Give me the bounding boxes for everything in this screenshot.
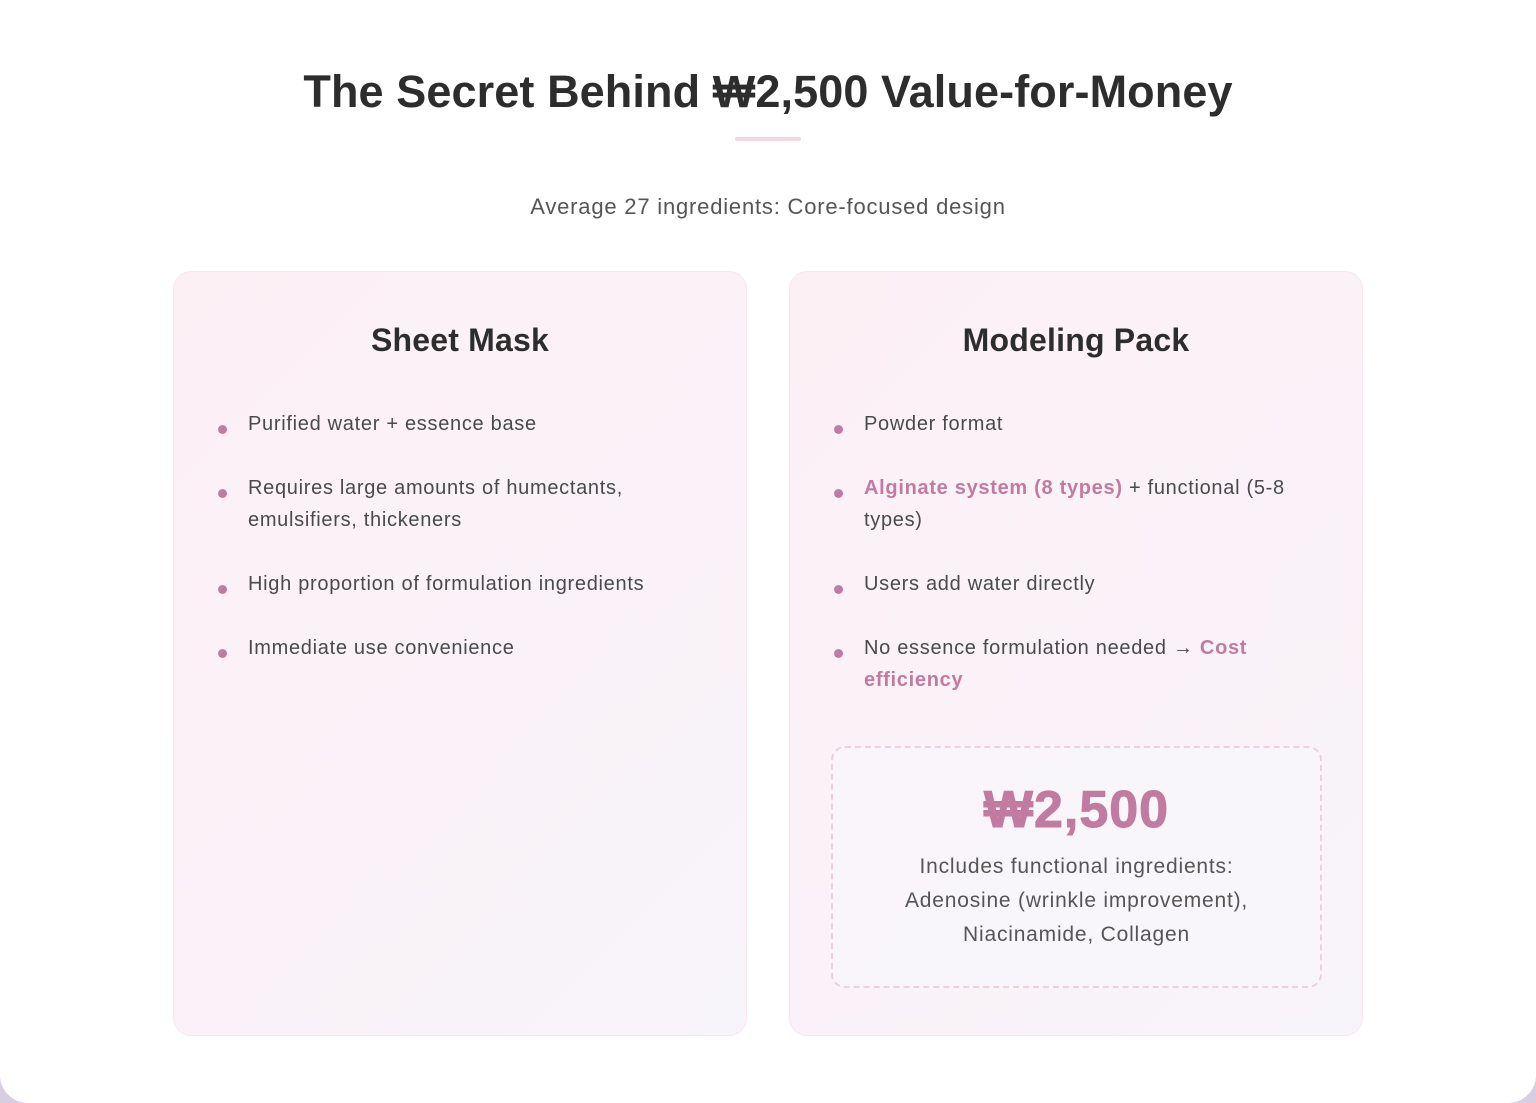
bullet list: modeling pack: efficiency [864, 669, 963, 691]
bullet list: modeling pack: Users add water directly [864, 573, 1095, 595]
callout: price: ₩2,500 [984, 781, 1169, 839]
bullet list: sheet mask: emulsifiers, thickeners [248, 509, 462, 531]
bullet list: modeling pack [834, 413, 1285, 691]
panel: sheet mask [173, 271, 747, 1036]
callout: price [831, 746, 1322, 988]
bullet list: sheet mask: High proportion of formulation ingredients [248, 573, 644, 595]
bullet list: sheet mask: Requires large amounts of humectants, [248, 477, 623, 499]
bullet list: modeling pack: No essence formulation needed → Cost [864, 637, 1247, 659]
bullet list: sheet mask: Purified water + essence base [248, 413, 537, 435]
bullet list: modeling pack: Alginate system (8 types) + functional (5-8 [864, 477, 1285, 499]
subtitle: Average 27 ingredients: Core-focused design [530, 194, 1006, 219]
callout: price: Adenosine (wrinkle improvement), [905, 889, 1248, 912]
bullet list: modeling pack: types) [864, 509, 923, 531]
bullet list: sheet mask [218, 413, 644, 659]
callout: price: Includes functional ingredients: [920, 855, 1233, 878]
bullet list: sheet mask: Immediate use convenience [248, 637, 515, 659]
callout: price: Niacinamide, Collagen [963, 923, 1190, 946]
title: The Secret Behind ₩2,500 Value-for-Money [303, 66, 1233, 117]
bullet list: modeling pack: Powder format [864, 413, 1003, 435]
panel: modeling pack [789, 271, 1363, 1036]
heading: modeling pack: Modeling Pack [963, 322, 1189, 358]
heading: sheet mask: Sheet Mask [371, 322, 549, 358]
